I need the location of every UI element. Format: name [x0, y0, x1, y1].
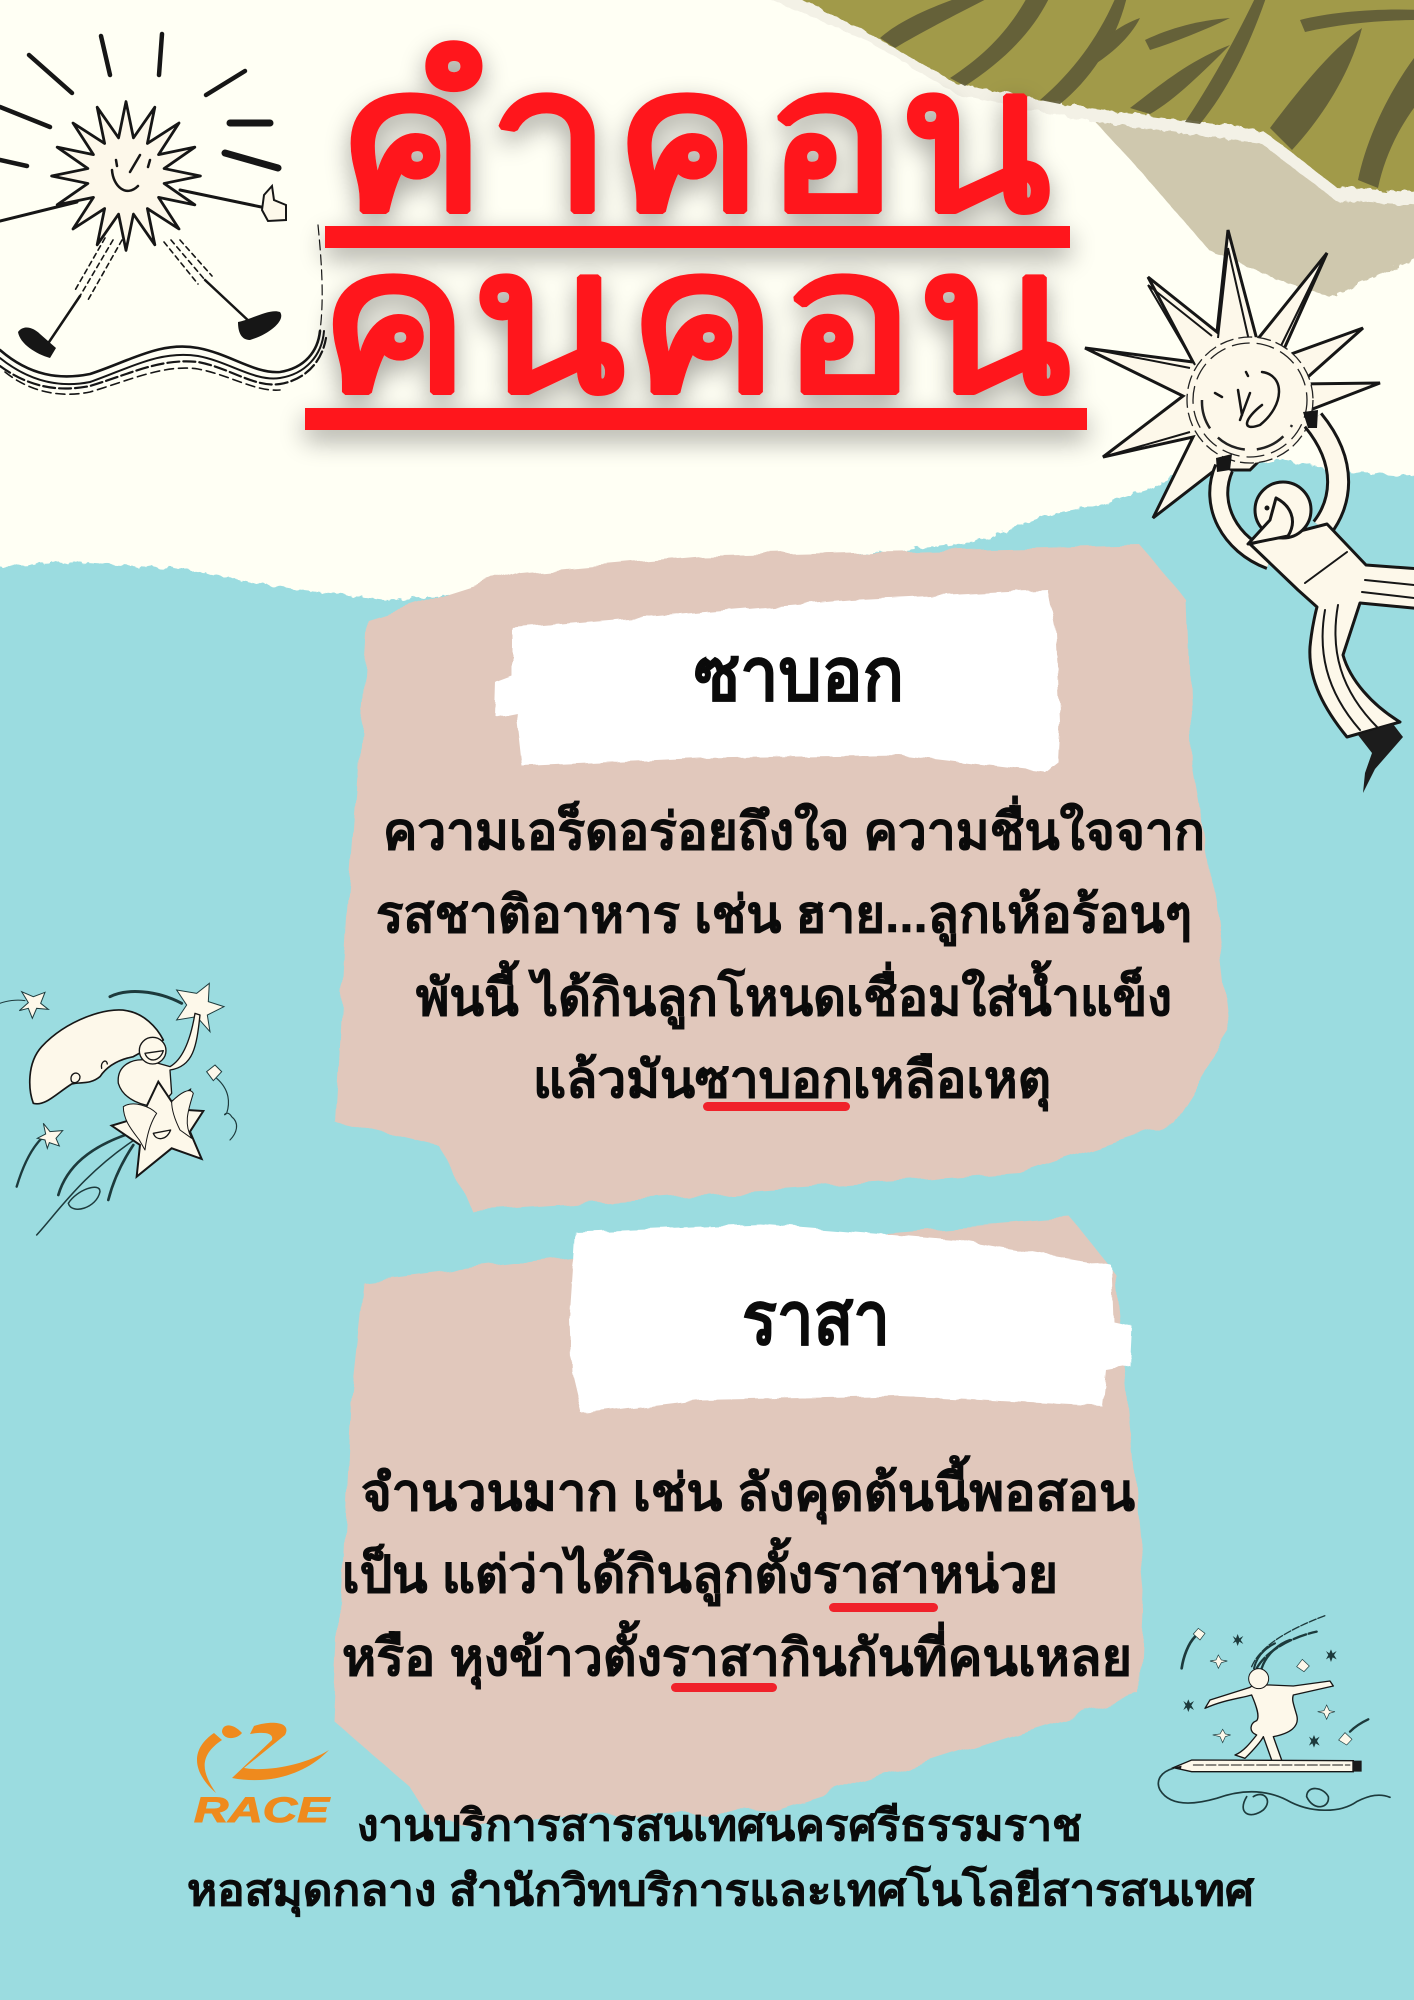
- heading brush: [495, 590, 1060, 772]
- wavy ground: [0, 225, 326, 394]
- boot: [1358, 724, 1403, 793]
- star: [1085, 230, 1380, 518]
- body text: [342, 1455, 1135, 1690]
- icon: sun character running with thumb up: [0, 34, 326, 394]
- body text: ความเอร็ดอร่อยถึงใจ ความชื่นใจจาก: [383, 796, 1205, 860]
- logo: RACE: [194, 1723, 331, 1830]
- torn paper white edge: [748, 0, 1414, 207]
- body text: [376, 796, 1205, 1112]
- heading: ซาบอก: [694, 633, 904, 716]
- panel background: [334, 1218, 1146, 1823]
- panel background: [335, 546, 1230, 1211]
- bird head: [1255, 482, 1311, 538]
- title underline 1: [325, 226, 1070, 248]
- star face: [1187, 337, 1313, 463]
- title line 1: คำคอน: [336, 25, 1052, 255]
- footer text: [187, 1802, 1255, 1918]
- underline: [703, 1102, 850, 1111]
- torn olive paper: [784, 0, 1414, 194]
- underline 1: [829, 1603, 938, 1612]
- logo text: RACE: [194, 1791, 331, 1830]
- body text: จำนวนมาก เช่น ลังคุดต้นนี้พอสอน: [361, 1455, 1135, 1525]
- underline 2: [671, 1683, 777, 1692]
- bird person legs: [1250, 524, 1414, 737]
- title underline 2: [305, 408, 1087, 430]
- footer text: งานบริการสารสนเทศนครศรีธรรมราช: [357, 1802, 1082, 1850]
- icon: star figure held by bird person: [1085, 230, 1414, 793]
- body text: พันนี้ ได้กินลูกโหนดเชื่อมใส่น้ำแข็ง: [416, 960, 1172, 1030]
- title: [305, 25, 1087, 436]
- panel: ราสา: [334, 1218, 1146, 1823]
- body text: หรือ หุงข้าวตั้งราสากินกันที่คนเหลย: [342, 1620, 1132, 1690]
- heading brush: [570, 1224, 1132, 1414]
- torn beige paper: [1087, 100, 1414, 297]
- footer text: หอสมุดกลาง สำนักวิทบริการและเทศโนโลยีสารสนเทศ: [187, 1864, 1255, 1918]
- logo swoosh: [197, 1723, 329, 1793]
- icon: figure surfing on a pencil: [1158, 1615, 1390, 1815]
- heading: ราสา: [742, 1277, 890, 1360]
- background: torn cream paper: [0, 0, 1414, 600]
- body text: เป็น แต่ว่าได้กินลูกตั้งราสาหน่วย: [342, 1537, 1058, 1607]
- rays: [0, 34, 278, 168]
- body text: รสชาติอาหาร เช่น ฮาย...ลูกเห้อร้อนๆ: [376, 886, 1192, 947]
- bird person arms: [1219, 468, 1270, 560]
- title line 2: คนคอน: [318, 206, 1072, 436]
- body text: แล้วมันซาบอกเหลือเหตุ: [533, 1051, 1051, 1112]
- panel: ซาบอก: [335, 546, 1230, 1211]
- icon: flying figure on a star: [0, 983, 237, 1235]
